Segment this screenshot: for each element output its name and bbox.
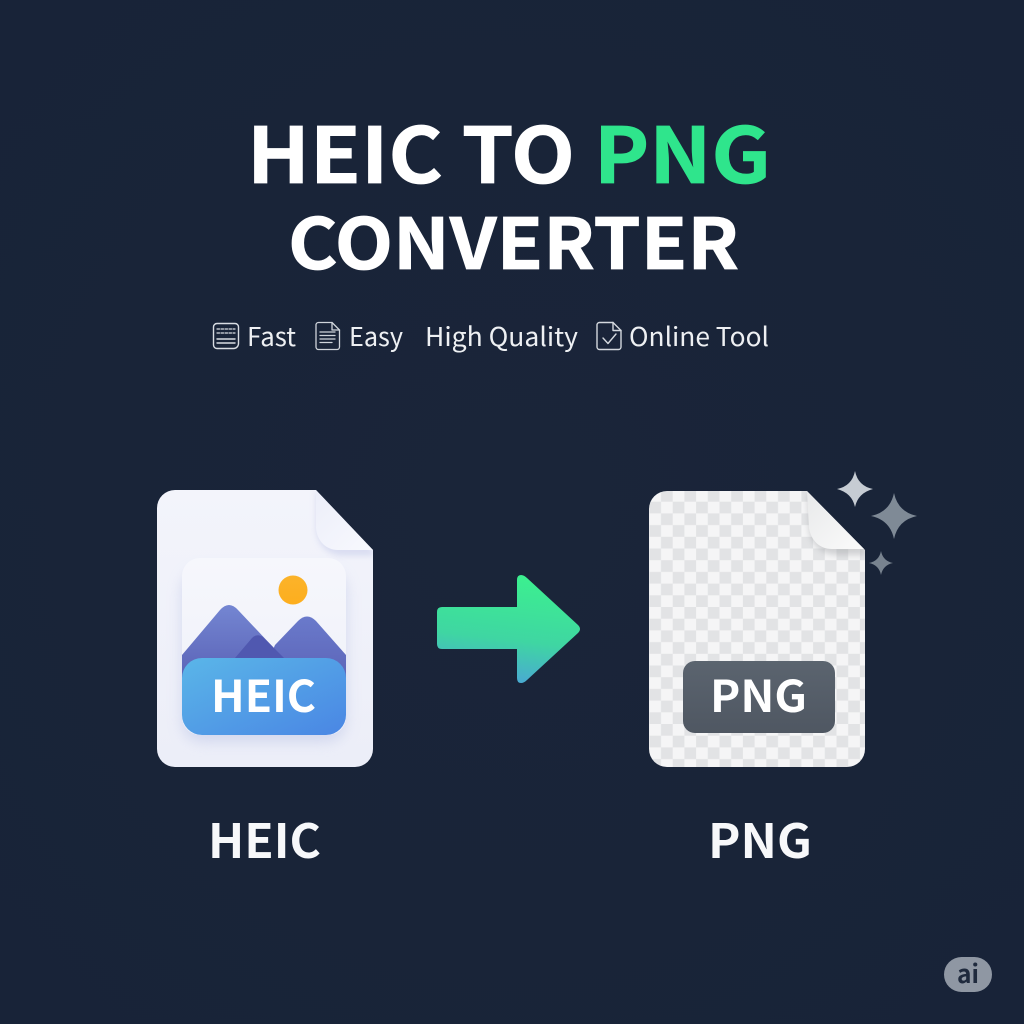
mountain overlap (235, 635, 284, 658)
HEIC badge (182, 658, 346, 735)
label: Online Tool: Online Tool (629, 317, 769, 354)
ai watermark badge (944, 955, 992, 992)
HEIC file icon (157, 490, 373, 767)
small sparkle (869, 551, 893, 575)
ai watermark badge: ai (957, 955, 979, 991)
image card (182, 558, 346, 735)
image card shadow (182, 570, 346, 742)
icon: fast document (214, 324, 239, 349)
sun (278, 576, 308, 604)
HEIC badge: HEIC (211, 661, 316, 725)
large grey sparkle (871, 493, 917, 539)
transparent checker document (649, 491, 865, 767)
title line 2: CONVERTER (288, 189, 739, 290)
icon: easy document (316, 322, 340, 350)
conversion arrow (437, 575, 580, 683)
page fold (316, 490, 373, 556)
PNG badge: PNG (710, 661, 807, 725)
PNG file icon (649, 491, 865, 767)
infographic canvas (157, 124, 992, 992)
title line 1: HEIC TO PNG (247, 95, 771, 206)
feature row (214, 317, 769, 354)
page fold (807, 491, 865, 555)
label: Fast: Fast (247, 317, 296, 354)
label: High Quality: High Quality (425, 317, 578, 354)
document body (157, 490, 373, 767)
label: PNG: PNG (708, 803, 812, 872)
title (247, 95, 771, 290)
icon: online tool check document (597, 322, 621, 350)
label: Easy: Easy (349, 317, 403, 354)
PNG badge (683, 661, 835, 733)
label: HEIC: HEIC (208, 803, 321, 872)
large light sparkle (837, 471, 873, 507)
sparkles (837, 471, 917, 575)
right mountain (274, 616, 346, 678)
left mountain (182, 605, 274, 678)
